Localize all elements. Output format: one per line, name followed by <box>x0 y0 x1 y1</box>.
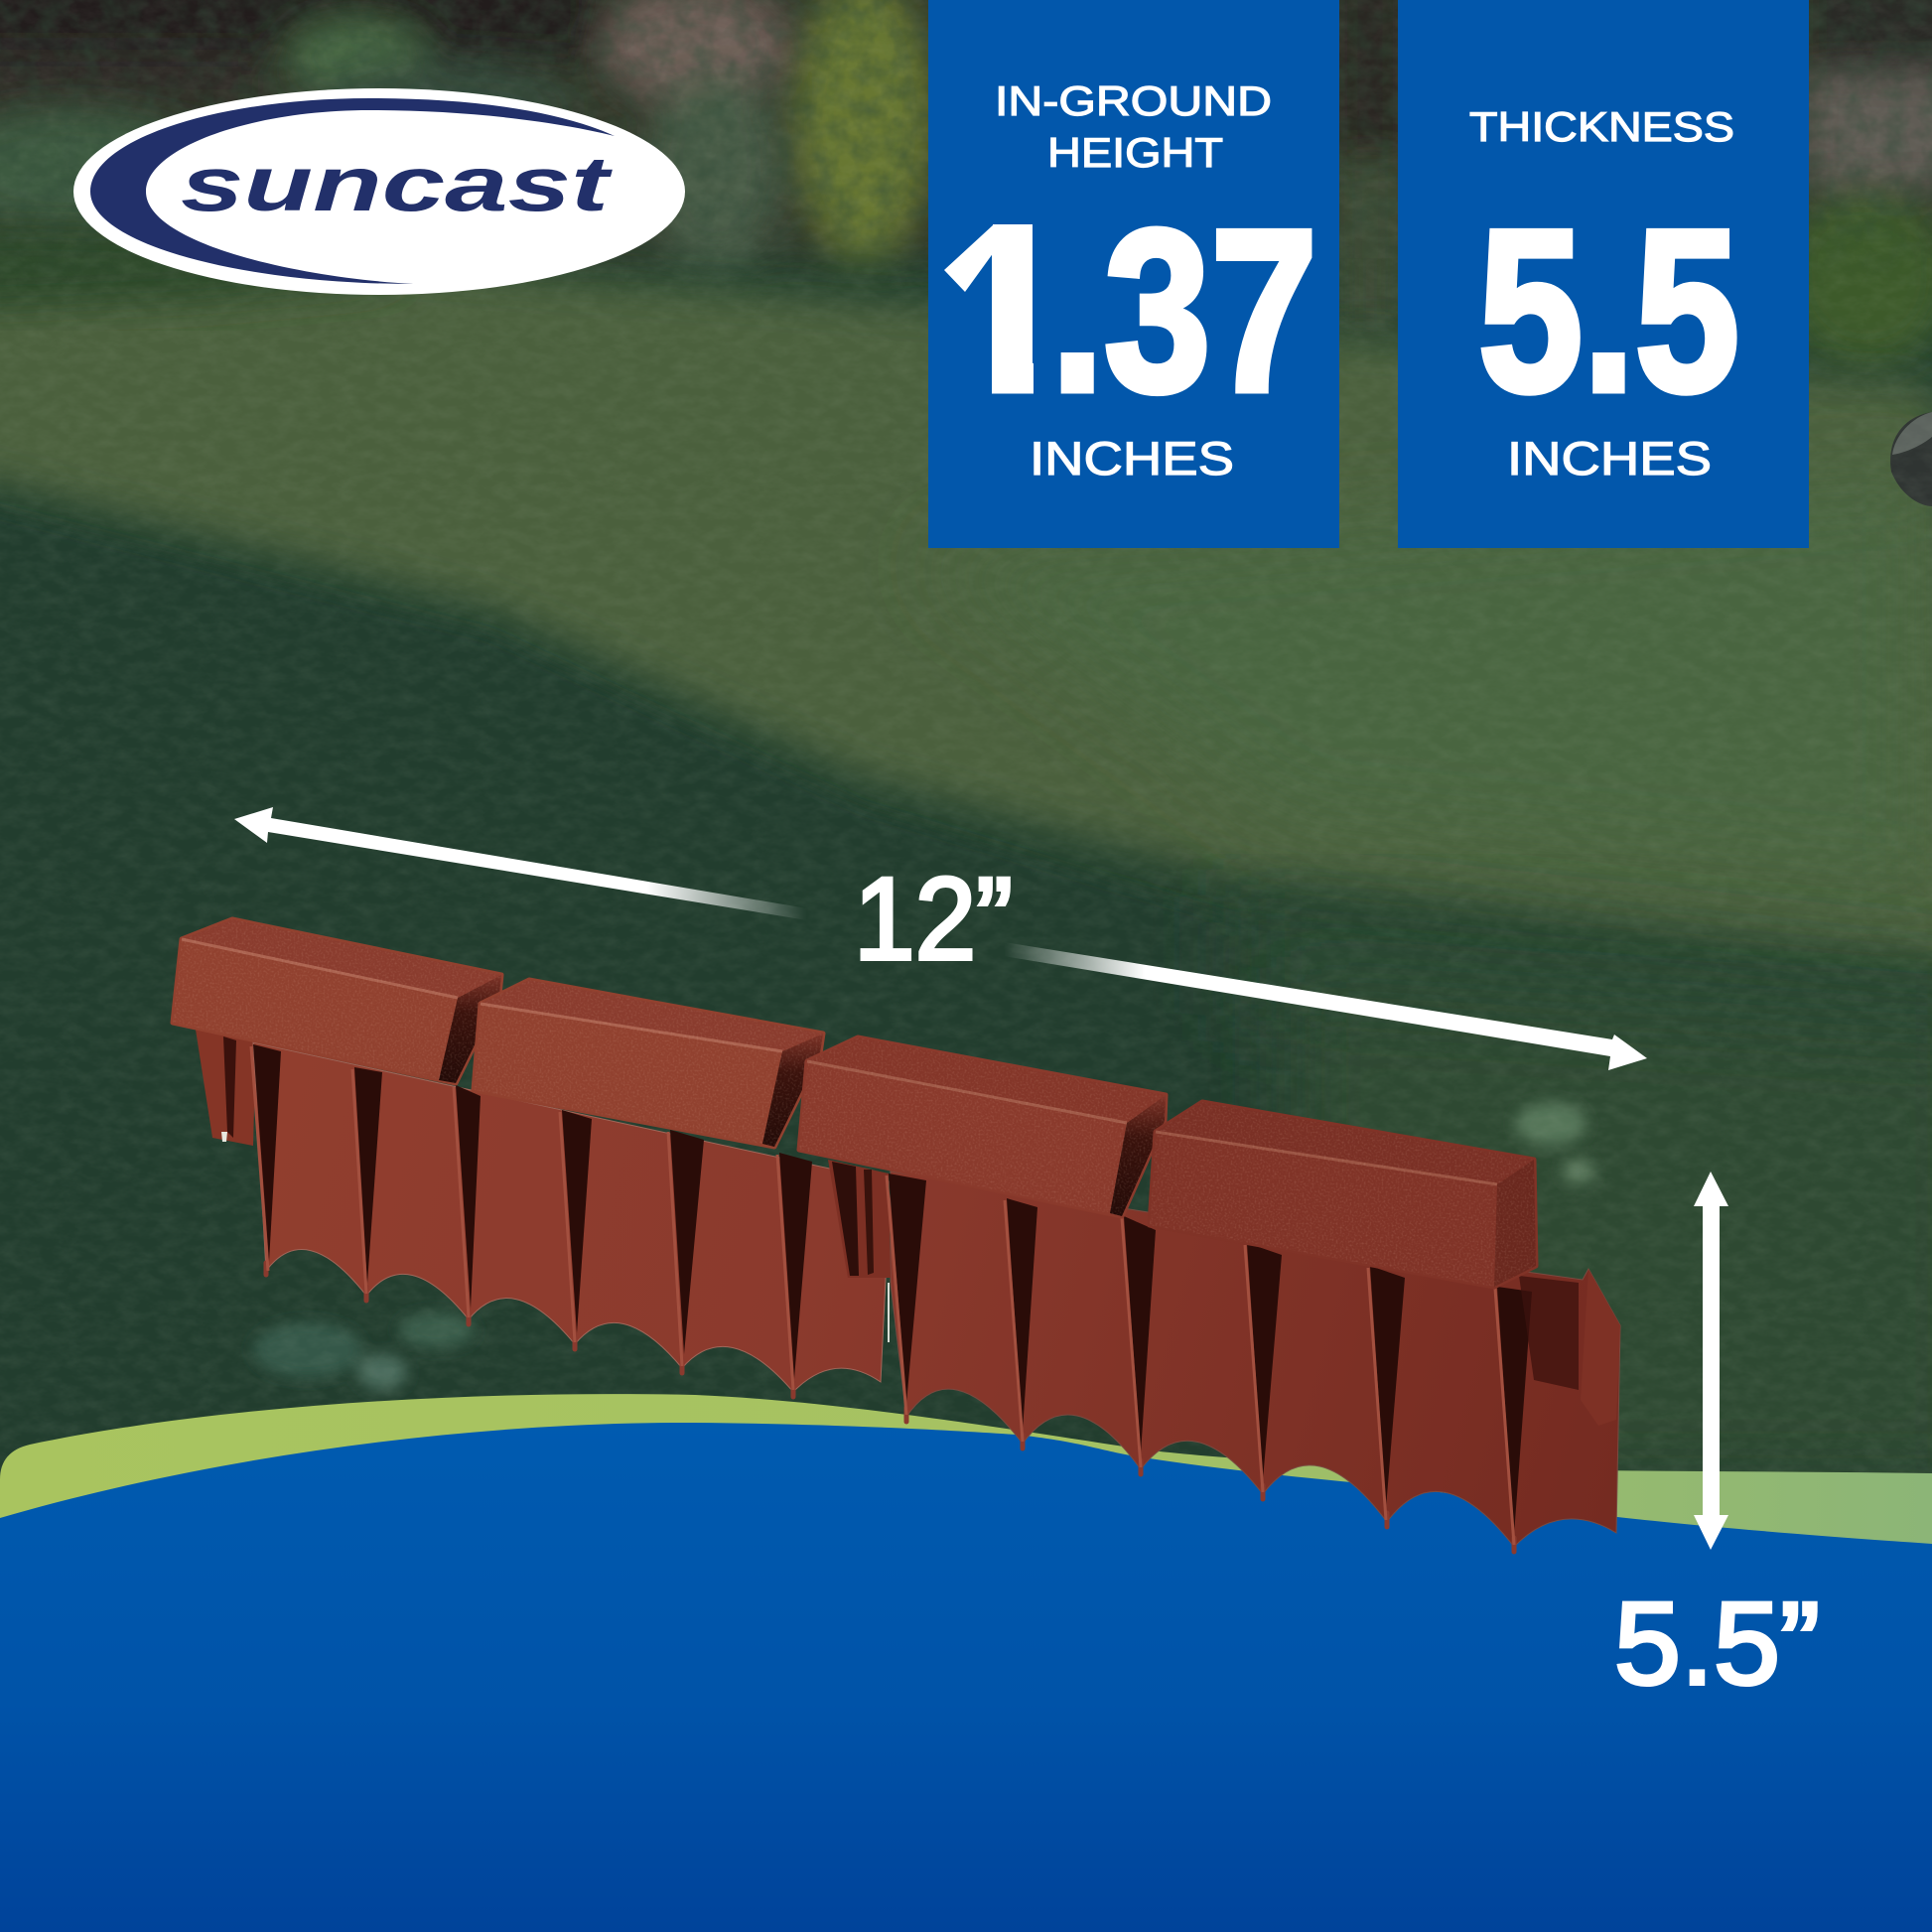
edging body right <box>891 1172 1620 1547</box>
shaded lawn <box>0 496 1932 1588</box>
arrow: height <box>1694 1172 1728 1550</box>
blue wave footer <box>0 1423 1932 1932</box>
rock at right edge <box>1890 412 1932 506</box>
arrow: length left <box>234 807 807 920</box>
label: HEIGHT <box>1047 129 1223 176</box>
unit: INCHES <box>1030 432 1234 484</box>
label: 5.5 inches: 5.5” <box>1614 1579 1820 1710</box>
panel: thickness <box>1398 0 1809 548</box>
edging body left <box>253 1042 889 1392</box>
brick cap 2 <box>474 980 823 1147</box>
value: 1.37 <box>944 183 1317 440</box>
navy swoosh <box>90 98 615 284</box>
rib highlight lines <box>251 1046 1514 1545</box>
middle connector tabs <box>828 1160 891 1278</box>
wordmark: suncast <box>181 140 613 227</box>
panel: in-ground height <box>928 0 1339 548</box>
sunlit lawn <box>0 260 1932 973</box>
unit: INCHES <box>1507 432 1712 484</box>
leaves in lawn <box>253 1102 1594 1390</box>
arrow: length right <box>1004 942 1647 1070</box>
end tab shading <box>1581 1269 1620 1426</box>
dark ribs <box>253 1044 1532 1535</box>
white oval <box>73 88 685 295</box>
label <box>995 77 1272 176</box>
fence and plants strip <box>0 0 1932 365</box>
product: brown lawn edging <box>173 919 1620 1552</box>
logo: suncast <box>73 88 685 295</box>
lime green swoosh <box>0 1394 1932 1588</box>
label: 12 inches: 12” <box>854 854 1013 985</box>
left connector tabs <box>196 1030 256 1146</box>
brick cap 4 <box>1150 1102 1536 1287</box>
label: IN-GROUND <box>995 77 1272 124</box>
brick cap 3 <box>799 1037 1166 1216</box>
white sliver between pieces <box>888 1283 890 1342</box>
label: THICKNESS <box>1469 103 1734 150</box>
spike tips <box>266 1263 1514 1552</box>
brick cap 1 <box>173 919 501 1083</box>
garden photo background <box>0 0 1932 1473</box>
value: 5.5 <box>1478 183 1739 440</box>
